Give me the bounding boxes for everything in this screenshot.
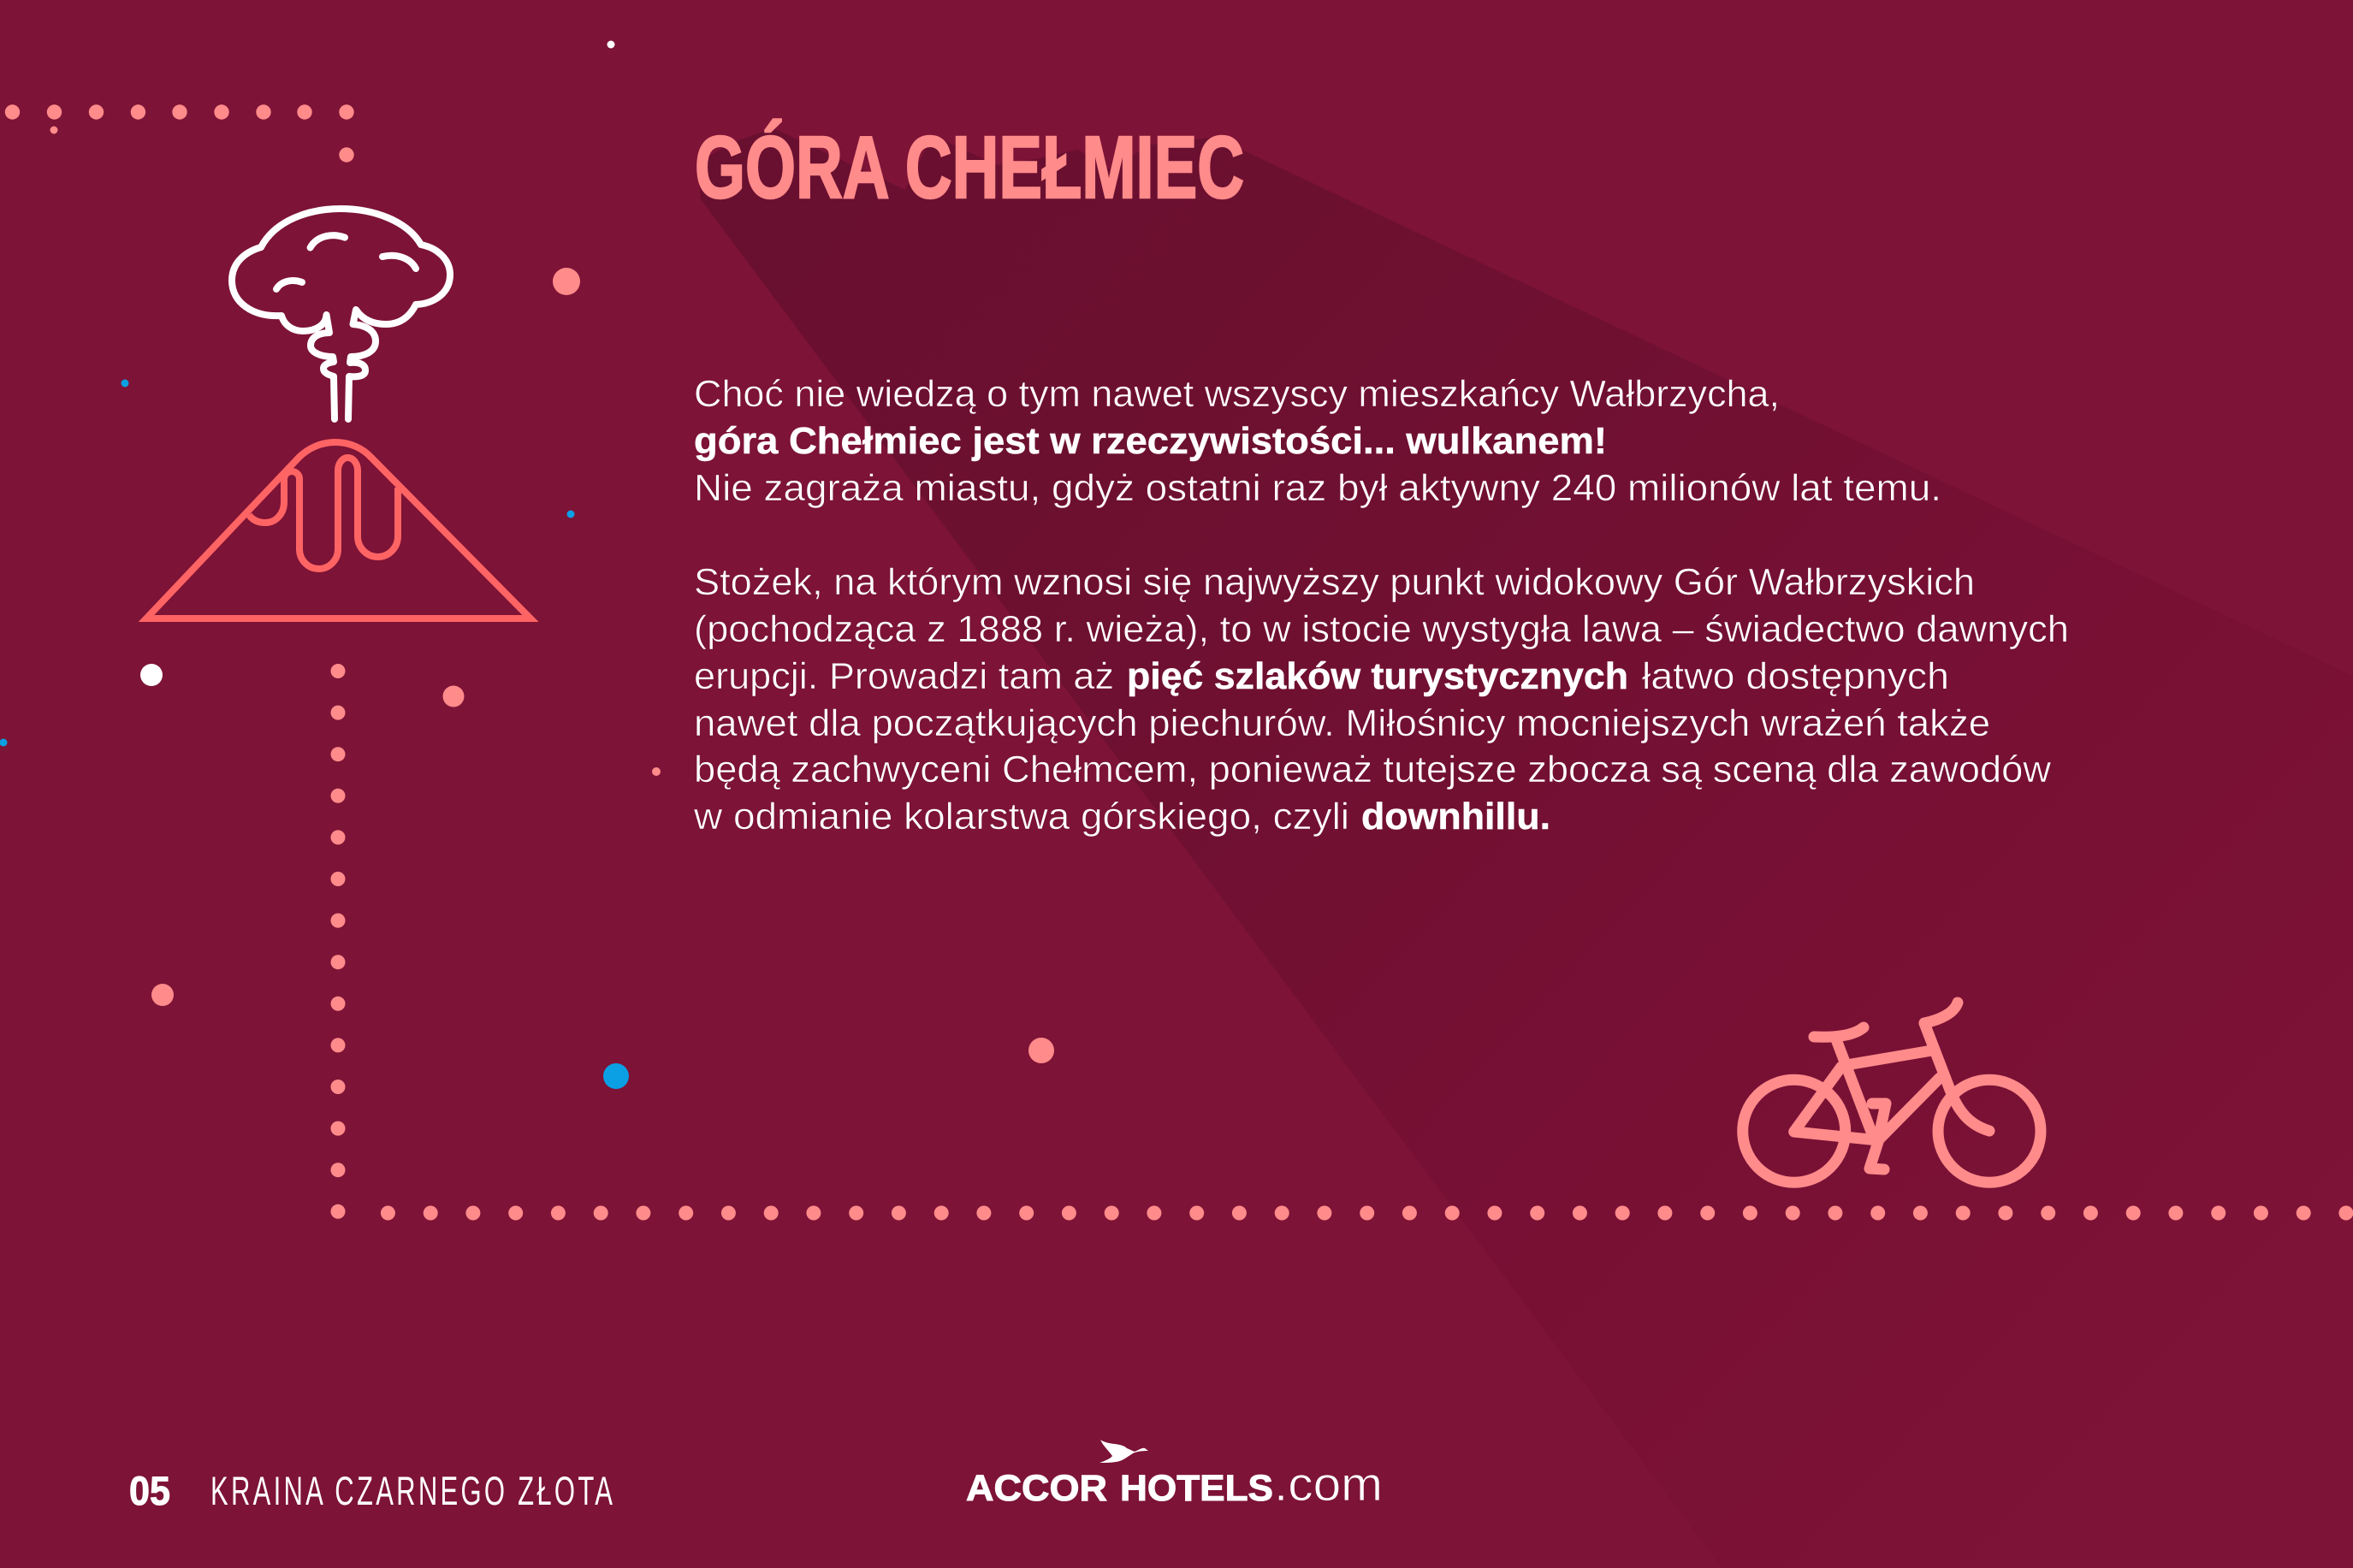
text block: second paragraph: downhillu. xyxy=(1361,796,1550,837)
icon: eruption cloud xyxy=(232,209,450,419)
text block: second paragraph: erupcji. Prowadzi tam aż xyxy=(694,655,1114,697)
scattered decorative dots xyxy=(0,41,1054,1089)
text block: first paragraph xyxy=(694,373,1941,509)
text block: first paragraph: Nie zagraża miastu, gdyż ostatni raz był aktywny 240 milionów lat temu. xyxy=(694,467,1941,509)
text block: second paragraph: Stożek, na którym wznosi się najwyższy punkt widokowy Gór Wałbrzyskich xyxy=(694,561,1975,603)
logo: AccorHotels.com xyxy=(966,1440,1383,1511)
page number: 05 xyxy=(129,1468,170,1513)
text block: second paragraph: (pochodząca z 1888 r. wieża), to w istocie wystygła lawa – świadectwo dawnych xyxy=(694,608,2069,650)
text block: second paragraph: pięć szlaków turystycznych xyxy=(1127,655,1628,697)
logo: AccorHotels.com: ACCOR xyxy=(966,1468,1107,1509)
logo: AccorHotels.com: HOTELS xyxy=(1120,1468,1273,1509)
dotted line: vertical xyxy=(330,664,346,1219)
long shadow of title xyxy=(697,128,2353,1568)
text block: first paragraph: góra Chełmiec jest w rzeczywistości... wulkanem! xyxy=(694,420,1607,462)
icon: volcano xyxy=(146,442,530,618)
text block: second paragraph: nawet dla początkujących piechurów. Miłośnicy mocniejszych wrażeń także xyxy=(694,702,1990,744)
text block: second paragraph: w odmianie kolarstwa górskiego, czyli xyxy=(693,796,1349,837)
text block: first paragraph: Choć nie wiedzą o tym nawet wszyscy mieszkańcy Wałbrzycha, xyxy=(694,373,1780,415)
icon: bicycle xyxy=(1743,1003,2041,1182)
text block: second paragraph xyxy=(693,561,2069,837)
text block: second paragraph: łatwo dostępnych xyxy=(1642,655,1949,697)
dotted line: top xyxy=(5,104,354,163)
text block: second paragraph: będą zachwyceni Chełmcem, ponieważ tutejsze zbocza są sceną dla zawodów xyxy=(694,748,2051,790)
section name: KRAINA CZARNEGO ZŁOTA xyxy=(210,1470,613,1514)
logo: AccorHotels.com: .com xyxy=(1274,1457,1383,1511)
title: GÓRA CHEŁMIEC xyxy=(695,118,1244,216)
dotted line: horizontal xyxy=(381,1206,2353,1220)
